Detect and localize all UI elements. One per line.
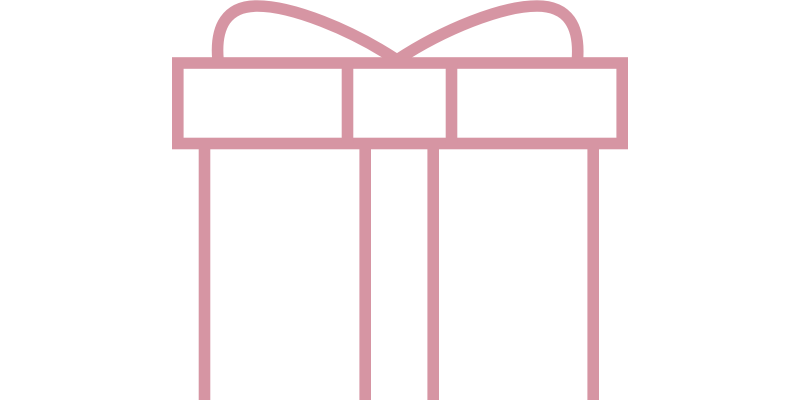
icon: box body lines [204, 149, 593, 400]
icon: ribbon bow [218, 6, 578, 60]
icon: box lid [178, 63, 622, 144]
